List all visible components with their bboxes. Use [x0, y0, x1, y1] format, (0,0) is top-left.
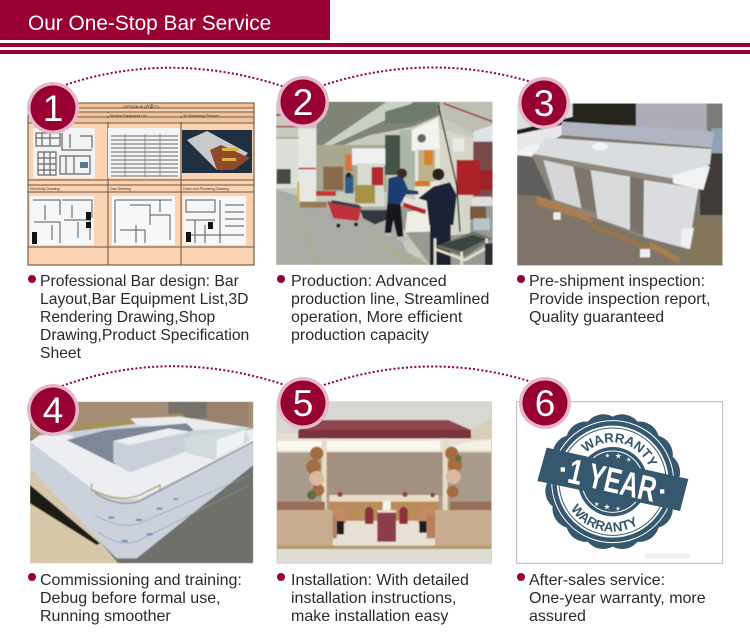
- number badge 2: [277, 76, 329, 128]
- number badge 4: 4: [43, 390, 63, 431]
- description 3: Quality guaranteed: [529, 309, 664, 326]
- description 5: make installation easy: [291, 608, 448, 625]
- panel: step 2 production: [276, 76, 493, 344]
- header banner: [0, 0, 750, 54]
- stamp curved text: [572, 433, 658, 532]
- panel: step 1 bar design: [27, 82, 254, 362]
- warranty stamp image: ★: [615, 506, 621, 513]
- description 5: installation instructions,: [291, 590, 456, 607]
- bullet: [517, 573, 525, 581]
- drawing sheet: 3D Rendering Pictures: [183, 114, 219, 118]
- description 1: Rendering Drawing,Shop: [40, 309, 216, 326]
- description 1: Drawing,Product Specification: [40, 327, 249, 344]
- description 2: production capacity: [291, 327, 429, 344]
- number badge 5: [277, 377, 329, 429]
- bar counter photo: [30, 402, 253, 563]
- number badge 1: [27, 82, 79, 134]
- description 1: Sheet: [40, 345, 82, 362]
- drawing sheet: [28, 103, 254, 265]
- dotted connector arcs: [62, 67, 535, 386]
- description 2: Production: Advanced: [291, 273, 447, 290]
- number badge 6: [519, 377, 571, 429]
- drawing sheet: Drain and Plumbing Drawing: [183, 187, 229, 191]
- warranty stamp image: ★: [615, 452, 622, 461]
- description 6: assured: [529, 608, 586, 625]
- bullet: [517, 275, 525, 283]
- bullet: [277, 573, 285, 581]
- warranty stamp image: ★: [594, 501, 599, 508]
- drawing sheet: Electricity Drawing: [30, 187, 60, 191]
- description 6: After-sales service:: [529, 572, 665, 589]
- description 4: Commissioning and training:: [40, 572, 242, 589]
- stamp main text: 1 YEAR: [565, 452, 660, 510]
- warranty stamp image: ★: [605, 452, 610, 459]
- number badge 6: 6: [535, 383, 555, 424]
- store kiosk photo: [277, 402, 492, 563]
- number badge 4: [27, 384, 79, 436]
- panel: step 6 after-sales: [516, 377, 724, 625]
- description 1: Professional Bar design: Bar: [40, 273, 239, 290]
- description 4: Running smoother: [40, 608, 171, 625]
- panel: step 5 installation: [277, 377, 492, 625]
- panel: step 4 commissioning: [27, 384, 253, 625]
- description 2: production line, Streamlined: [291, 291, 489, 308]
- drawing sheet: Kitchen Equipment List: [110, 114, 147, 118]
- number badge 2: 2: [293, 82, 313, 123]
- description 2: operation, More efficient: [291, 309, 463, 326]
- bullet: [28, 275, 36, 283]
- number badge 5: 5: [293, 383, 313, 424]
- warranty stamp image: ★: [603, 503, 611, 512]
- warranty stamp image: ★: [626, 457, 631, 464]
- panel: step 3 inspection: [517, 77, 723, 326]
- bullet: [28, 573, 36, 581]
- description 6: One-year warranty, more: [529, 590, 706, 607]
- number badge 3: [518, 77, 570, 129]
- description 5: Installation: With detailed: [291, 572, 469, 589]
- number badge 3: 3: [534, 83, 554, 124]
- bullet: [277, 275, 285, 283]
- description 3: Provide inspection report,: [529, 291, 710, 308]
- counter photo: [517, 103, 723, 266]
- stamp curved text: WARRANTY: [580, 433, 658, 464]
- description 4: Debug before formal use,: [40, 590, 221, 607]
- description 1: Layout,Bar Equipment List,3D: [40, 291, 248, 308]
- drawing sheet: OPTION III (方案三): [123, 103, 159, 109]
- description 3: Pre-shipment inspection:: [529, 273, 705, 290]
- stamp curved text: WARRANTY: [572, 503, 636, 532]
- warranty stamp image: [516, 401, 724, 564]
- number badge 1: 1: [43, 88, 63, 129]
- factory photo: [276, 102, 493, 265]
- drawing sheet: Gas Drawing: [110, 187, 131, 191]
- title: Our One-Stop Bar Service: [28, 12, 271, 35]
